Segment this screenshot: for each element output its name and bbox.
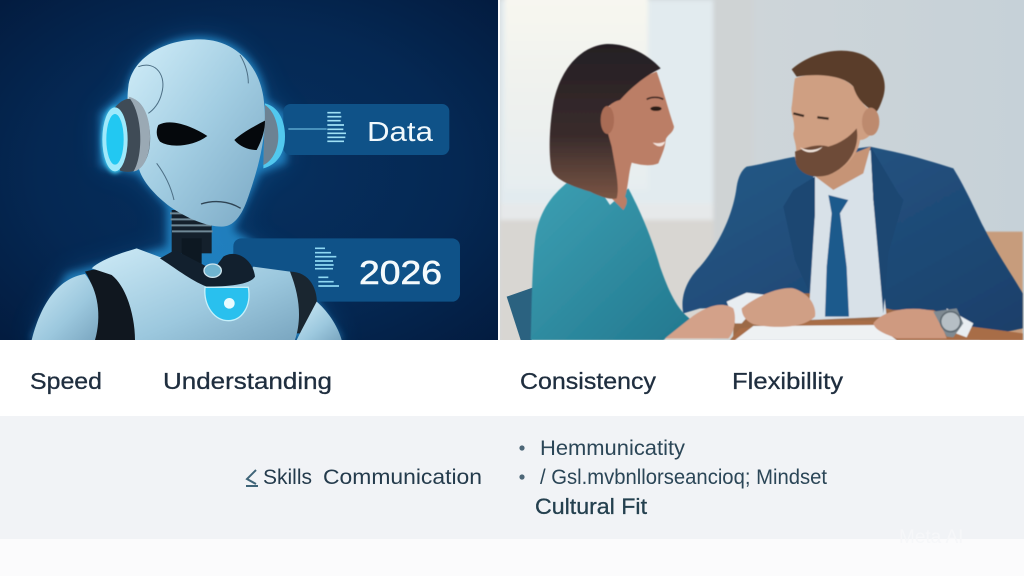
man beard: [795, 128, 857, 176]
top labels strip: [0, 340, 1024, 416]
robot wide glow: [30, 37, 343, 340]
woman ear: [601, 106, 614, 134]
man shirt: [808, 150, 887, 320]
bullet list: [519, 437, 827, 519]
paper document: [735, 325, 897, 340]
woman hair: [550, 44, 661, 199]
panel: human interview photo: [500, 0, 1024, 343]
right ear headphone: [263, 103, 285, 168]
man: [682, 51, 1023, 337]
faint watermark: Meta AI: [899, 527, 963, 548]
robot shoulders and torso: [32, 248, 342, 340]
office window: [500, 0, 714, 317]
man tie: [825, 195, 849, 317]
chest light: [205, 287, 249, 321]
man ear: [862, 108, 879, 136]
wooden sideboard: [980, 232, 1023, 340]
man hair: [792, 51, 885, 113]
footer strip: [0, 539, 1024, 576]
woman mouth: [653, 141, 665, 146]
robot figure: [32, 39, 342, 340]
text: Skills: Skills: [263, 466, 312, 489]
man shirt cuffs: [727, 293, 973, 337]
label: Flexibillity: Flexibillity: [732, 368, 844, 394]
man face: [790, 74, 870, 164]
man lapels: [783, 147, 903, 313]
icon: skills glyph: [246, 470, 258, 486]
robot eyes: [157, 121, 265, 150]
head seams: [138, 55, 248, 208]
table behind figures: [732, 292, 936, 336]
bullet text: Hemmunicatity: Hemmunicatity: [540, 437, 686, 460]
skills panel: [0, 416, 1024, 539]
robot tight glow: [30, 37, 343, 340]
text: Cultural Fit: Cultural Fit: [535, 494, 647, 519]
man smile: [800, 147, 823, 152]
woman: [531, 44, 692, 340]
chair: [507, 287, 533, 340]
label: Speed: Speed: [30, 368, 102, 394]
woman hand: [665, 305, 735, 338]
label: Understanding: Understanding: [163, 368, 332, 394]
left ear headphone: [102, 97, 150, 173]
man suit: [682, 147, 1023, 337]
woman blouse: [531, 182, 692, 340]
robot arm joints: [85, 269, 317, 340]
man neck: [813, 147, 871, 190]
label: Data: [283, 104, 449, 155]
bullet text: garbled Mindset line: / Gsl.mvbnllorseancioq; Mindset: [540, 466, 827, 489]
label text: 2026: 2026: [359, 254, 442, 291]
text: Communication: Communication: [323, 466, 482, 489]
conference table: [730, 320, 1023, 340]
label: 2026: [233, 238, 460, 302]
man left hand: [742, 288, 815, 327]
man right hand and watch: [873, 308, 963, 338]
man eyes: [793, 113, 829, 119]
robot head: [128, 39, 265, 227]
panel: AI robot: [0, 0, 498, 340]
label text: Data: Data: [367, 116, 433, 147]
label: Consistency: Consistency: [520, 368, 657, 394]
robot neck: [170, 210, 213, 268]
woman neck and face: [603, 72, 674, 210]
woman eye and brow: [647, 97, 663, 111]
